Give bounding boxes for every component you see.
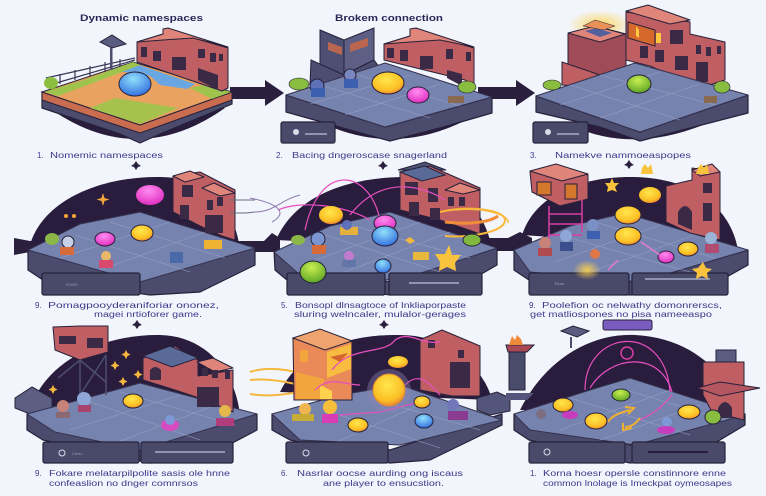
text: magei nrtioforer game. — [94, 310, 202, 319]
characters — [45, 233, 222, 268]
slate surface — [27, 383, 257, 450]
ui bar right — [389, 273, 482, 295]
yellow ball — [372, 72, 404, 94]
pink ball top — [136, 185, 164, 205]
stars — [64, 193, 110, 218]
title: Broken connection: Brokem connection — [335, 13, 443, 24]
stone platform — [272, 414, 502, 463]
bushes — [289, 78, 476, 93]
crate — [704, 96, 717, 103]
star — [605, 178, 619, 192]
right building — [420, 330, 480, 396]
panel 3: namespaces — [533, 5, 748, 143]
right building — [626, 12, 725, 88]
balls — [553, 389, 700, 429]
purple sign — [603, 320, 652, 330]
text: ane player to ensucstion. — [323, 479, 444, 488]
arrow: panel 4 to 5 — [14, 233, 280, 255]
caption 5: 5. — [281, 301, 288, 310]
text: Bacing dngeroscase snagerland — [292, 151, 447, 160]
characters — [538, 219, 719, 259]
flame swirl — [250, 369, 320, 395]
text: Poolefion oc nelwathy domonrerscs, — [542, 301, 722, 310]
down marker 4 — [132, 320, 142, 329]
ui bar — [286, 442, 388, 463]
night sky dome — [280, 335, 492, 400]
caption 7: 9. — [35, 469, 42, 478]
blue ball — [119, 72, 151, 96]
glowing tower — [293, 330, 352, 400]
text: Nomemic namespaces — [50, 151, 163, 160]
stilt tower — [53, 326, 108, 360]
green zones — [90, 98, 178, 124]
down marker 2 — [378, 161, 388, 170]
night sky dome — [520, 335, 738, 410]
text: get matliospones no pisa nameeaspo — [530, 310, 713, 319]
ui bars — [43, 442, 139, 463]
night sky dome — [276, 177, 492, 250]
text: confeaslion no dnger comnrsos — [49, 479, 198, 488]
sign — [561, 326, 589, 337]
pink rays — [608, 242, 660, 270]
night sky dome — [522, 177, 738, 250]
yellow ball — [131, 225, 153, 241]
building — [173, 172, 235, 240]
down marker 3 — [624, 160, 634, 169]
caption 3: 3. — [530, 151, 537, 160]
panel 6: network connection: Eiran — [555, 281, 564, 286]
small yellow tile — [405, 237, 415, 244]
panel 4: multiplayer game: E0000 — [66, 282, 78, 287]
right tower — [703, 362, 744, 420]
panel 4: multiplayer game — [28, 171, 255, 295]
gray machine — [320, 30, 344, 75]
small balls — [348, 356, 433, 432]
characters — [292, 399, 468, 423]
cube — [477, 392, 510, 415]
stone platform — [536, 95, 748, 141]
roof stub below caption 2 — [398, 162, 446, 170]
caption 1: 1. — [37, 151, 44, 160]
title: Dynamic namespaces: Dynamic namespaces — [80, 13, 203, 24]
arrow: panel 5 to 6 — [480, 232, 532, 251]
stars — [48, 350, 142, 394]
text: Pomagpooyderaniforiar ononez, — [48, 301, 219, 310]
slate surface — [28, 212, 255, 282]
caption 8: 6. — [281, 469, 288, 478]
text: common lnolage is Imeckpat oymeosapes — [543, 479, 732, 488]
garage — [198, 68, 218, 90]
ui bars — [529, 273, 629, 295]
building — [137, 29, 228, 91]
pink ball — [374, 215, 396, 231]
down marker 5 — [379, 320, 389, 329]
terrain top — [42, 62, 232, 125]
panel 7: danger connection: Cieno — [72, 451, 83, 456]
text: Bonsopl dlnsagtoce of Inkliaporpaste — [295, 301, 467, 310]
text: Fokare melatarpilpolite sasis ole hnne — [49, 469, 231, 478]
arrow: panel 1 to 2 — [230, 80, 284, 106]
pink ball — [95, 232, 115, 246]
fence — [46, 58, 135, 86]
caption 4: 9. — [35, 301, 42, 310]
panel 8: node activation — [250, 329, 510, 463]
small blue ball — [375, 259, 391, 273]
balls — [615, 187, 698, 263]
caption 9: 1. — [530, 469, 537, 478]
stone platform — [42, 92, 232, 143]
big coin halo — [367, 369, 411, 413]
text: Korna hoesr opersle constinnore enne — [543, 469, 727, 478]
stone platform — [286, 95, 492, 141]
characters — [536, 409, 721, 434]
stone platform — [514, 250, 748, 295]
flame swirl — [440, 209, 508, 236]
left block building — [568, 26, 626, 85]
arrow: panel 2 to 3 — [478, 80, 535, 106]
slate surface — [286, 63, 492, 127]
bush — [44, 77, 58, 89]
panel 2: broken connection — [281, 28, 492, 143]
down marker 1 — [131, 161, 141, 170]
slate surface — [514, 213, 748, 282]
building — [384, 29, 474, 85]
text: Namekve nammoeaspopes — [555, 151, 691, 160]
left tower — [530, 165, 588, 206]
panel 7: danger connection — [15, 326, 257, 463]
building — [143, 346, 233, 412]
crate — [448, 96, 464, 103]
glows — [573, 260, 601, 280]
star — [435, 245, 461, 271]
stone platform — [514, 414, 745, 463]
orange arrows — [608, 407, 640, 430]
night sky dome — [30, 335, 240, 415]
lamp post — [100, 35, 126, 48]
panel 5: connection arcs — [250, 166, 508, 295]
platform shadow — [570, 115, 725, 139]
blue water zone — [110, 63, 195, 89]
glow — [568, 10, 632, 40]
pink ball — [407, 87, 429, 103]
ui box — [281, 122, 335, 143]
yellow ball — [123, 394, 143, 408]
left torch tower — [509, 352, 525, 390]
slate surface — [514, 378, 745, 445]
platform shadow — [55, 108, 225, 139]
ui bars — [529, 442, 625, 463]
coin body — [373, 374, 405, 406]
ui bar — [42, 273, 140, 295]
building — [400, 166, 480, 234]
panel 1: dynamic namespaces — [42, 28, 232, 143]
pink arcs — [315, 337, 440, 415]
stone platform — [274, 248, 497, 295]
night sky dome — [30, 177, 240, 250]
purple arrow swirl — [250, 195, 300, 222]
panel 9: common linkage — [506, 326, 760, 463]
gray cube — [15, 387, 52, 414]
stone platform — [28, 248, 255, 295]
ui bar left — [287, 273, 385, 295]
slate surface — [536, 63, 748, 132]
text: Nasrlar oocse aurding ong iscaus — [297, 469, 463, 478]
pink arcs — [278, 180, 445, 230]
terrain side — [42, 92, 232, 133]
caption 6: 9. — [529, 301, 536, 310]
arrow: curved white — [230, 200, 255, 213]
yellow glowing ball — [319, 206, 343, 224]
blue ball — [372, 226, 398, 246]
caption 2: 2. — [276, 151, 283, 160]
slate surface — [272, 385, 502, 445]
characters — [310, 69, 358, 97]
characters — [291, 220, 481, 267]
ui box — [533, 122, 588, 143]
platform shadow — [320, 118, 470, 139]
characters — [56, 392, 234, 431]
right tower — [666, 168, 720, 240]
green blob — [300, 261, 326, 283]
stone platform — [27, 414, 257, 463]
panel 6: network connection — [514, 164, 748, 295]
pink arcs — [585, 341, 672, 420]
bushes — [543, 80, 730, 93]
slate surface — [274, 212, 497, 280]
green ball — [627, 75, 651, 93]
text: sluring welncaler, mulalor-gerages — [294, 310, 466, 319]
sun glyph — [621, 347, 633, 359]
